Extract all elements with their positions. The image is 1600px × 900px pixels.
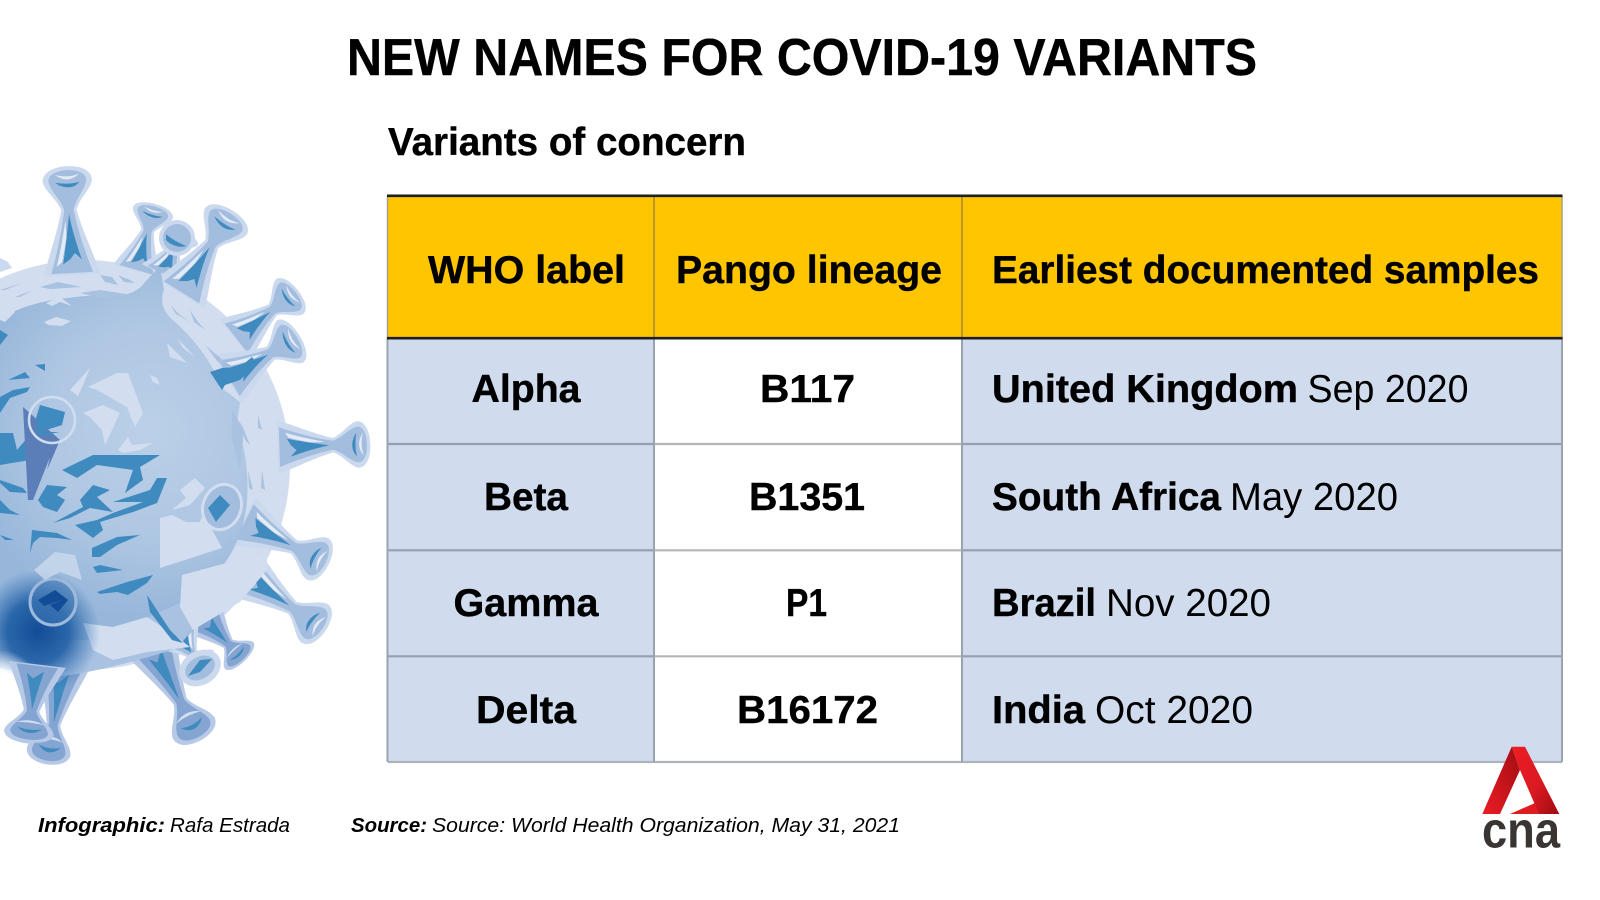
row: Delta xyxy=(476,689,1253,732)
row: Alpha: Sep 2020 xyxy=(1308,368,1468,411)
row: Beta: Beta xyxy=(484,476,568,519)
sub-element: rim hatching xyxy=(0,275,265,490)
column header: Earliest documented samples: Earliest documented samples xyxy=(992,249,1539,292)
sub-element: surface ring right xyxy=(196,479,248,535)
first column background xyxy=(388,338,654,762)
table grid lines xyxy=(387,196,1562,762)
row: Alpha xyxy=(472,368,1468,411)
header row background xyxy=(388,196,1562,338)
sub-element: surface ring lower left xyxy=(30,552,82,625)
row: Gamma: Gamma xyxy=(454,582,599,625)
credit: infographic xyxy=(38,815,290,837)
third column background xyxy=(962,338,1562,762)
row: Alpha: B117 xyxy=(760,368,855,411)
logo: cna xyxy=(1482,747,1561,858)
row: Alpha: Alpha xyxy=(472,368,581,411)
sub-element: lower left fade xyxy=(0,650,42,692)
sub-element: dark shaded zone xyxy=(0,565,105,695)
illustration: coronavirus particle xyxy=(0,165,371,769)
row: Delta: Oct 2020 xyxy=(1095,689,1253,732)
column header: Pango lineage: Pango lineage xyxy=(676,249,942,292)
credit: infographic: Rafa Estrada xyxy=(170,815,290,837)
sub-element: surface ring upper left xyxy=(29,397,75,443)
credit: source: Source: xyxy=(351,815,427,837)
subtitle: variants of concern: Variants of concern xyxy=(388,121,746,164)
sub-element: light surface patches xyxy=(0,297,267,660)
logo: cna: cna xyxy=(1482,802,1561,858)
row: Beta: South Africa xyxy=(992,476,1221,519)
sub-element: dark blue surface streaks xyxy=(0,330,257,643)
row: Gamma: Brazil xyxy=(992,582,1096,625)
sub-element: lower rim band xyxy=(0,598,202,678)
credit: source: Source: World Health Organization, May 31, 2021 xyxy=(432,815,900,837)
credit: infographic: Infographic: xyxy=(38,815,165,837)
row: Beta: May 2020 xyxy=(1230,476,1398,519)
row: Gamma: P1 xyxy=(786,582,827,625)
row: Alpha: United Kingdom xyxy=(992,368,1298,411)
row: Gamma xyxy=(454,582,1271,625)
row: Beta xyxy=(484,476,1398,519)
row: Beta: B1351 xyxy=(749,476,865,519)
row: Delta: Delta xyxy=(476,689,576,732)
row: Gamma: Nov 2020 xyxy=(1106,582,1271,625)
row: Delta: India xyxy=(992,689,1085,732)
sub-element: translucent wedge xyxy=(23,407,60,500)
title: NEW NAMES FOR COVID-19 VARIANTS xyxy=(347,29,1257,87)
column header: WHO label: WHO label xyxy=(428,249,625,292)
sub-element: shaded virus core xyxy=(0,266,248,653)
row: Delta: B16172 xyxy=(737,689,878,732)
sub-element: lower left spike foot xyxy=(0,661,66,746)
table: variants of concern xyxy=(387,196,1562,762)
